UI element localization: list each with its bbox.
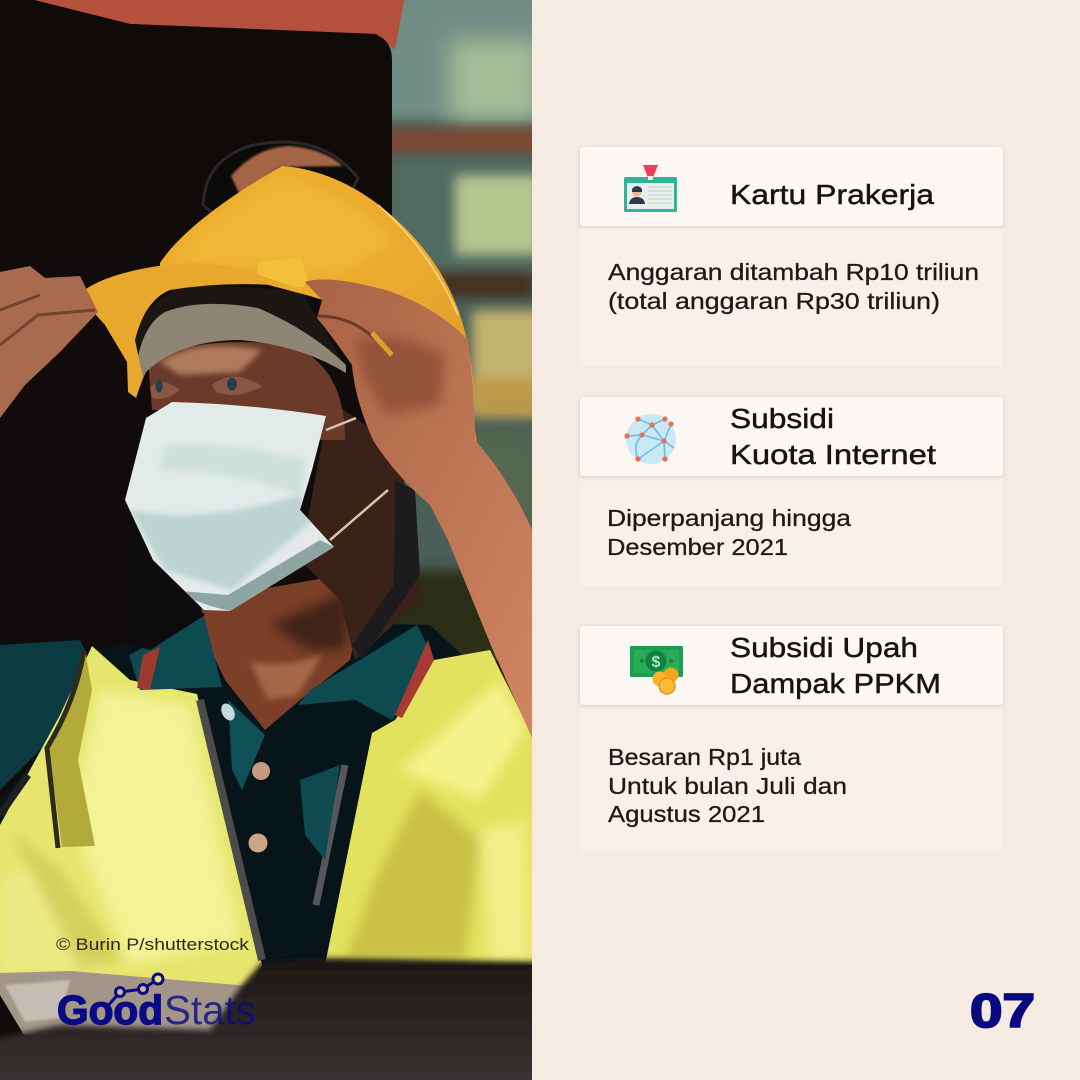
chin-strap buckle <box>352 480 420 660</box>
shirt buttons <box>218 701 270 852</box>
body text: (total anggaran Rp30 triliun) <box>608 288 940 314</box>
right hi-vis vest panel <box>325 650 532 965</box>
panel: worker photo illustration <box>0 0 550 1080</box>
hair and head shadow <box>127 612 205 650</box>
helmet liner <box>136 304 346 385</box>
headrest opening <box>203 142 358 215</box>
helmet highlights <box>378 205 458 315</box>
body card <box>580 226 1002 366</box>
logo: GoodStats <box>57 974 256 1033</box>
left sleeve <box>0 640 90 790</box>
heading: Kuota Internet <box>730 439 936 470</box>
body card <box>580 476 1002 586</box>
body text <box>608 259 979 314</box>
finger gap <box>318 316 374 338</box>
palm shading <box>355 337 445 415</box>
header card <box>580 397 1003 476</box>
body text: Agustus 2021 <box>608 801 765 827</box>
blurred warehouse background <box>380 0 550 660</box>
body text: Diperpanjang hingga <box>607 505 852 531</box>
reflective strips <box>0 700 345 960</box>
warm glow behind helmet <box>231 146 343 195</box>
shirt placket teal <box>228 700 265 790</box>
body card <box>580 705 1002 851</box>
header card <box>580 147 1003 226</box>
photo credit: © Burin P/shutterstock <box>56 936 250 954</box>
right sleeve <box>506 720 532 890</box>
vest hem highlight <box>5 980 70 1022</box>
heading: Subsidi Upah <box>730 632 918 663</box>
header card <box>580 626 1003 705</box>
helmet dome <box>160 166 478 448</box>
dark seat back <box>34 0 392 216</box>
mask ear loops <box>326 418 388 540</box>
dark head side and ear <box>300 400 420 660</box>
red overhead beam <box>34 0 404 50</box>
logo wordmark Good: Good <box>57 987 163 1033</box>
body text <box>608 744 847 827</box>
heading <box>730 632 941 699</box>
neck <box>201 579 352 730</box>
right collar <box>298 625 434 720</box>
heading: Subsidi <box>730 403 834 434</box>
icon: globe network <box>624 414 676 464</box>
right arm and hand <box>305 280 532 738</box>
eyes <box>150 377 262 399</box>
face <box>148 342 345 440</box>
mask shading <box>130 444 334 611</box>
icon: banknote and coins <box>630 646 683 694</box>
helmet brim <box>86 264 303 398</box>
left hand creases <box>0 295 95 345</box>
helmet ridge <box>258 258 308 290</box>
logo network mark <box>106 974 163 1008</box>
right vest shadows and highlights <box>345 680 530 960</box>
left vest highlights <box>0 690 240 970</box>
chest shirt <box>0 624 462 963</box>
body text: Desember 2021 <box>607 534 788 560</box>
neck shadow and highlight <box>250 590 350 700</box>
blurred foreground shape <box>0 958 545 1080</box>
left hi-vis vest panel <box>0 646 262 990</box>
photo backdrop <box>0 0 532 1080</box>
vest pocket flap <box>48 650 95 847</box>
left hand <box>0 266 98 418</box>
panel: Kartu Prakerja <box>580 147 1003 366</box>
body text: Untuk bulan Juli dan <box>608 773 847 799</box>
body text: Besaran Rp1 juta <box>608 744 802 770</box>
forehead highlight <box>160 346 262 375</box>
body text: Anggaran ditambah Rp10 triliun <box>608 259 979 285</box>
heading: Dampak PPKM <box>730 668 941 699</box>
icon: banknote and coins: $ <box>652 654 661 671</box>
heading <box>730 403 936 470</box>
helmet dome lighter face <box>192 187 387 272</box>
panel: Subsidi Kuota Internet <box>580 397 1003 586</box>
vest lower hem <box>0 971 250 1035</box>
left collar <box>129 616 222 690</box>
helmet clip between fingers <box>372 333 392 355</box>
body text <box>607 505 852 560</box>
page number: 07 <box>970 984 1035 1037</box>
logo wordmark Stats: Stats <box>164 987 256 1033</box>
heading: Kartu Prakerja <box>730 179 934 210</box>
icon: ID card <box>624 165 677 212</box>
surgical mask <box>125 402 334 611</box>
panel: Subsidi Upah Dampak PPKM <box>580 626 1003 851</box>
helmet underside shadow <box>135 286 343 362</box>
